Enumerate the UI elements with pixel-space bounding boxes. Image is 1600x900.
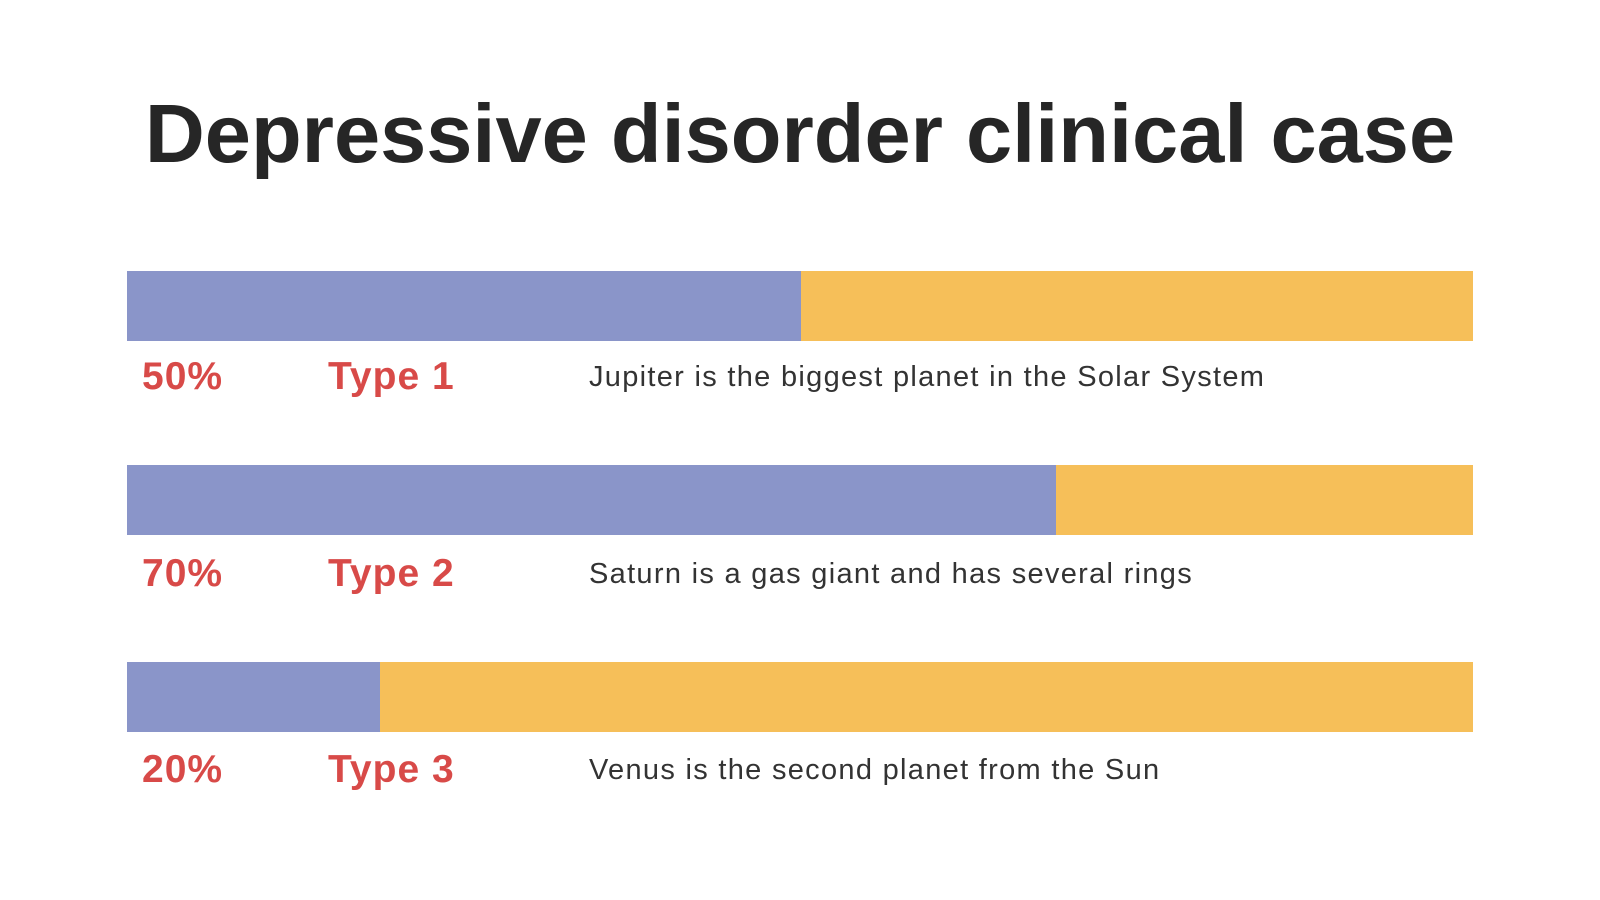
bar 2 (127, 465, 1473, 535)
bar 1 (127, 271, 1473, 341)
title: Depressive disorder clinical case (145, 87, 1455, 180)
percent 3: 20% (142, 748, 223, 791)
type 1: Type 1 (328, 355, 455, 398)
type 2: Type 2 (328, 552, 455, 595)
bar 3 (127, 662, 1473, 732)
row 2 labels (142, 552, 1193, 595)
percent 2: 70% (142, 552, 223, 595)
type 3: Type 3 (328, 748, 455, 791)
row 3 labels (142, 748, 1160, 791)
percent 1: 50% (142, 355, 223, 398)
description 1: Jupiter is the biggest planet in the Solar System (589, 361, 1265, 393)
row 1 labels (142, 355, 1265, 398)
description 2: Saturn is a gas giant and has several rings (589, 558, 1193, 590)
description 3: Venus is the second planet from the Sun (589, 754, 1160, 786)
